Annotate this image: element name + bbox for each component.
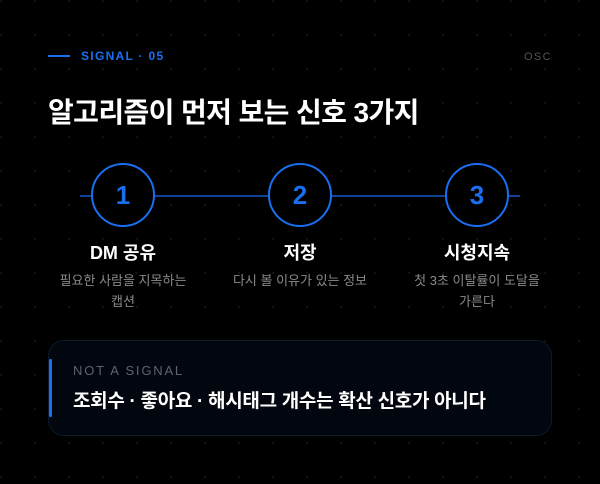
stepper: three signals	[60, 163, 540, 309]
eyebrow label: SIGNAL · 05	[81, 49, 164, 63]
title: 알고리즘이 먼저 보는 신호 3가지	[48, 97, 419, 128]
callout: not a signal	[48, 340, 552, 436]
step 3 text: 가른다	[459, 294, 495, 309]
step 2 text	[233, 243, 367, 288]
step 2 number circle: 2	[293, 180, 307, 210]
step 3 text: 시청지속	[444, 243, 510, 263]
step 2 text: 다시 볼 이유가 있는 정보	[233, 273, 367, 288]
callout text: 조회수 · 좋아요 · 해시태그 개수는 확산 신호가 아니다	[73, 391, 486, 412]
step 1 number circle	[91, 163, 155, 227]
step 1 number circle: 1	[116, 180, 130, 210]
step 3 text	[414, 243, 540, 309]
step 2 number circle	[268, 163, 332, 227]
step 3 number circle	[445, 163, 509, 227]
step 1 text: 필요한 사람을 지목하는	[60, 273, 186, 288]
connector line	[80, 195, 520, 197]
step 2 text: 저장	[283, 243, 317, 263]
step 1 text: DM 공유	[90, 243, 156, 263]
step 1 text	[60, 243, 186, 309]
eyebrow rule	[48, 55, 70, 57]
brand tag: OSC	[524, 51, 552, 63]
step 3 text: 첫 3초 이탈률이 도달을	[414, 273, 540, 288]
step 3 number circle: 3	[470, 180, 484, 210]
callout label: NOT A SIGNAL	[73, 363, 184, 378]
callout accent bar	[49, 359, 52, 417]
step 1 text: 캡션	[111, 294, 135, 309]
